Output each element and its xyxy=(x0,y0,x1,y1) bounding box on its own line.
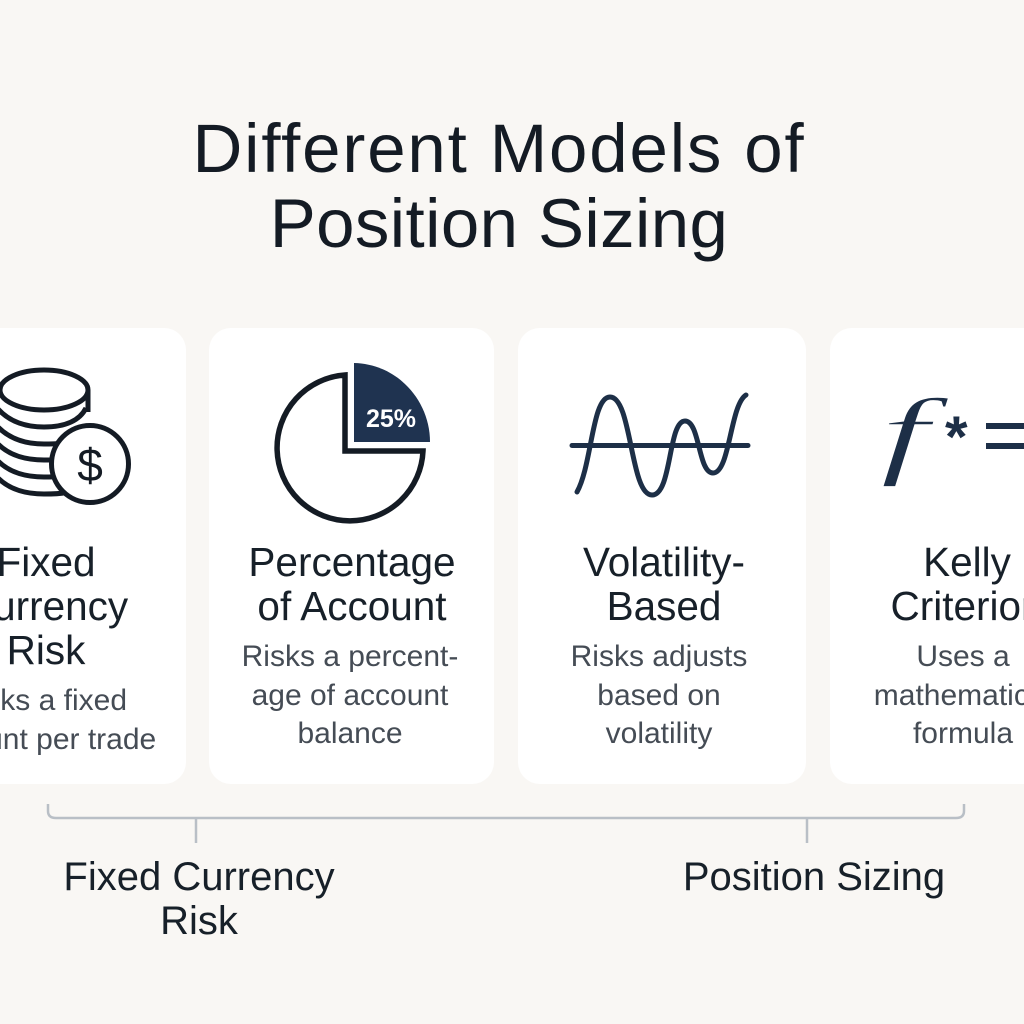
icon: pie chart 25% xyxy=(274,363,430,524)
description: percentage of account: balance xyxy=(297,717,403,750)
icon: kelly formula: * xyxy=(945,405,968,470)
panel: fixed currency risk xyxy=(0,328,186,784)
description: volatility-based xyxy=(571,640,747,750)
heading: percentage of account xyxy=(248,539,456,629)
title: Position Sizing xyxy=(270,185,728,262)
description: kelly criterion: formula xyxy=(913,717,1013,750)
description: kelly criterion xyxy=(874,640,1024,750)
title: Different Models of xyxy=(192,110,806,187)
label: fixed currency risk: Fixed Currency xyxy=(63,855,335,899)
heading: kelly criterion: Kelly xyxy=(923,539,1011,585)
description: volatility-based: Risks adjusts xyxy=(571,640,747,673)
description: percentage of account xyxy=(242,640,458,750)
icon: volatility wave xyxy=(570,392,750,498)
description: percentage of account: Risks a percent- xyxy=(242,640,458,673)
panel: kelly criterion xyxy=(830,328,1024,784)
heading: percentage of account: Percentage xyxy=(248,539,456,585)
heading: percentage of account: of Account xyxy=(257,583,447,629)
heading: kelly criterion xyxy=(890,539,1024,629)
description: fixed currency risk xyxy=(0,684,156,756)
label: fixed currency risk: Risk xyxy=(160,899,238,943)
heading: volatility-based xyxy=(583,539,745,629)
icon: coins with dollar xyxy=(0,368,131,505)
description: kelly criterion: Uses a xyxy=(916,640,1010,673)
label: position sizing: Position Sizing xyxy=(683,855,945,899)
panel: volatility-based xyxy=(518,328,806,784)
label: fixed currency risk xyxy=(63,855,335,943)
heading: fixed currency risk xyxy=(0,539,128,673)
description: percentage of account: age of account xyxy=(252,678,448,712)
icon: kelly formula xyxy=(880,385,1024,487)
icon: coins with dollar: $ xyxy=(77,439,103,491)
heading: fixed currency risk: Risk xyxy=(7,627,85,673)
title xyxy=(192,110,806,262)
description: volatility-based: based on xyxy=(597,678,721,712)
heading: volatility-based: Based xyxy=(607,583,721,629)
icon: pie chart 25%: 25% xyxy=(366,405,416,433)
panel: percentage of account xyxy=(209,328,494,784)
bracket connector xyxy=(46,804,966,843)
description: volatility-based: volatility xyxy=(606,717,712,750)
heading: volatility-based: Volatility- xyxy=(583,539,745,585)
